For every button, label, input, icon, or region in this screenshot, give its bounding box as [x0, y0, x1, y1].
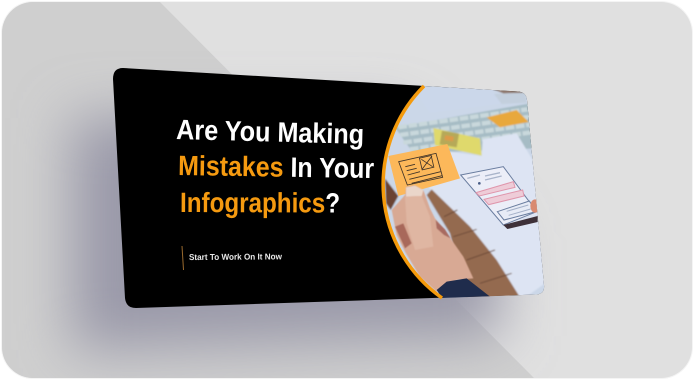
far orange note: [487, 110, 529, 127]
finger at right: [530, 199, 538, 213]
sketch on sticky note: [399, 153, 443, 185]
orange arc border: [383, 86, 442, 298]
blurred paper at top: [413, 87, 501, 113]
orange sticky note: [388, 144, 460, 196]
card base: [113, 68, 544, 308]
title line 3: Infographics?: [180, 187, 340, 219]
wood wedge left of hand: [385, 178, 398, 210]
title line 1: Are You Making: [176, 114, 365, 150]
photo: hand holding sticky note over wireframes: [384, 86, 544, 298]
blurred top right items: [493, 90, 524, 94]
keyboard: [395, 103, 535, 153]
title line 2: Mistakes In Your: [178, 150, 374, 184]
sleeve: [437, 278, 490, 300]
vertical accent line: [182, 246, 184, 270]
subtitle: Start To Work On It Now: [189, 251, 282, 262]
hand: [392, 185, 473, 292]
large white paper: [429, 133, 545, 300]
title: [176, 114, 374, 219]
photo backdrop: [384, 86, 544, 298]
yellow note: [433, 128, 482, 156]
panel: black banner card: [113, 68, 560, 310]
wooden table: [427, 189, 522, 300]
wireframe sketch: [461, 167, 538, 229]
